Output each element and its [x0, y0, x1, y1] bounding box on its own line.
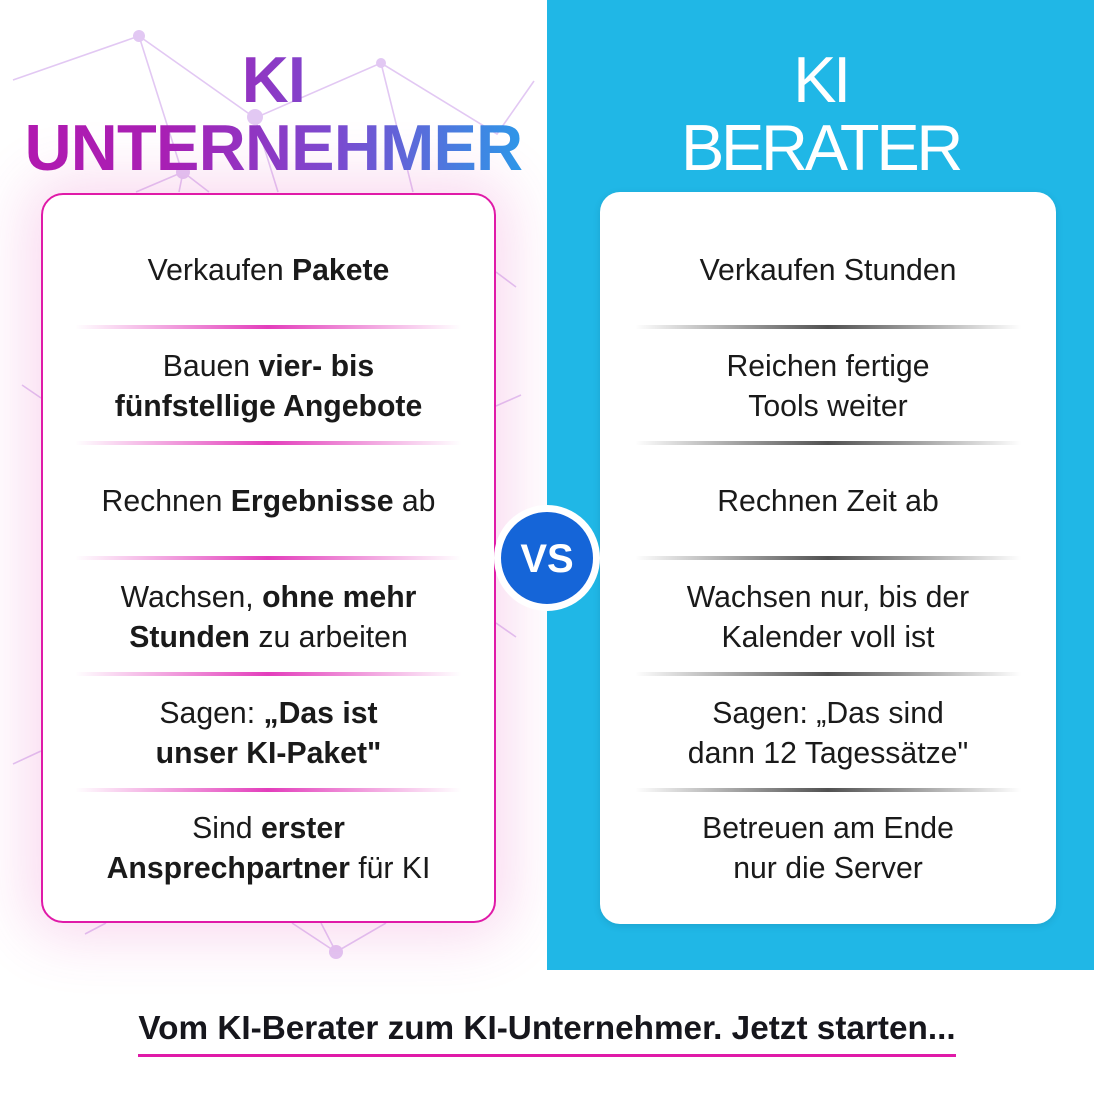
- item 5: Sagen: „Das ist: [159, 697, 378, 730]
- item 5: unser KI-Paket": [156, 737, 381, 770]
- item 5: [688, 697, 968, 770]
- call to action underline: [138, 1054, 956, 1057]
- item 6: [702, 812, 954, 885]
- item 4: Wachsen, ohne mehr: [121, 581, 416, 614]
- panel: KI Berater card: [600, 192, 1056, 924]
- heading: KI Berater: [681, 43, 960, 184]
- item 3: Rechnen Ergebnisse ab: [102, 485, 435, 518]
- heading: KI Unternehmer: UNTERNEHMER: [25, 111, 522, 184]
- item 2: Reichen fertige: [726, 350, 930, 383]
- item 2: [115, 350, 422, 423]
- heading: KI Unternehmer: [0, 46, 547, 186]
- item 6: nur die Server: [733, 852, 923, 885]
- item 4: [120, 581, 416, 654]
- heading: KI Unternehmer: KI: [242, 43, 305, 116]
- item 2: [726, 350, 930, 423]
- item 1: Verkaufen Pakete: [148, 254, 389, 287]
- item 6: [107, 812, 430, 885]
- list: KI Unternehmer items: [83, 254, 452, 885]
- item 4: [686, 581, 969, 654]
- item 6: Sind erster: [192, 812, 345, 845]
- left card glow: [41, 193, 496, 923]
- badge: VS: [494, 505, 600, 611]
- badge: VS: VS: [520, 537, 574, 581]
- panel: right background: [547, 0, 1094, 970]
- item 3: Rechnen Zeit ab: [717, 485, 939, 518]
- item 4: Stunden zu arbeiten: [129, 621, 408, 654]
- item 2: fünfstellige Angebote: [115, 390, 422, 423]
- call to action: Vom KI-Berater zum KI-Unternehmer. Jetzt starten...: [138, 1010, 956, 1047]
- item 5: dann 12 Tagessätze": [688, 737, 968, 770]
- item 1: Verkaufen Stunden: [700, 254, 956, 287]
- item 5: Sagen: „Das sind: [712, 697, 944, 730]
- item 2: Tools weiter: [748, 390, 908, 423]
- item 4: Wachsen nur, bis der: [687, 581, 969, 614]
- item 6: Ansprechpartner für KI: [107, 852, 430, 885]
- heading: KI Berater: KI: [793, 43, 848, 116]
- panel: left background: [4, 30, 534, 960]
- heading: KI Berater: BERATER: [681, 111, 960, 184]
- item 5: [156, 697, 381, 770]
- network pattern: [12, 30, 534, 959]
- panel: KI Unternehmer card: [41, 193, 496, 923]
- list: KI Berater items: [644, 254, 1012, 885]
- item 4: Kalender voll ist: [721, 621, 935, 654]
- item 6: Betreuen am Ende: [702, 812, 954, 845]
- item 2: Bauen vier- bis: [163, 350, 374, 383]
